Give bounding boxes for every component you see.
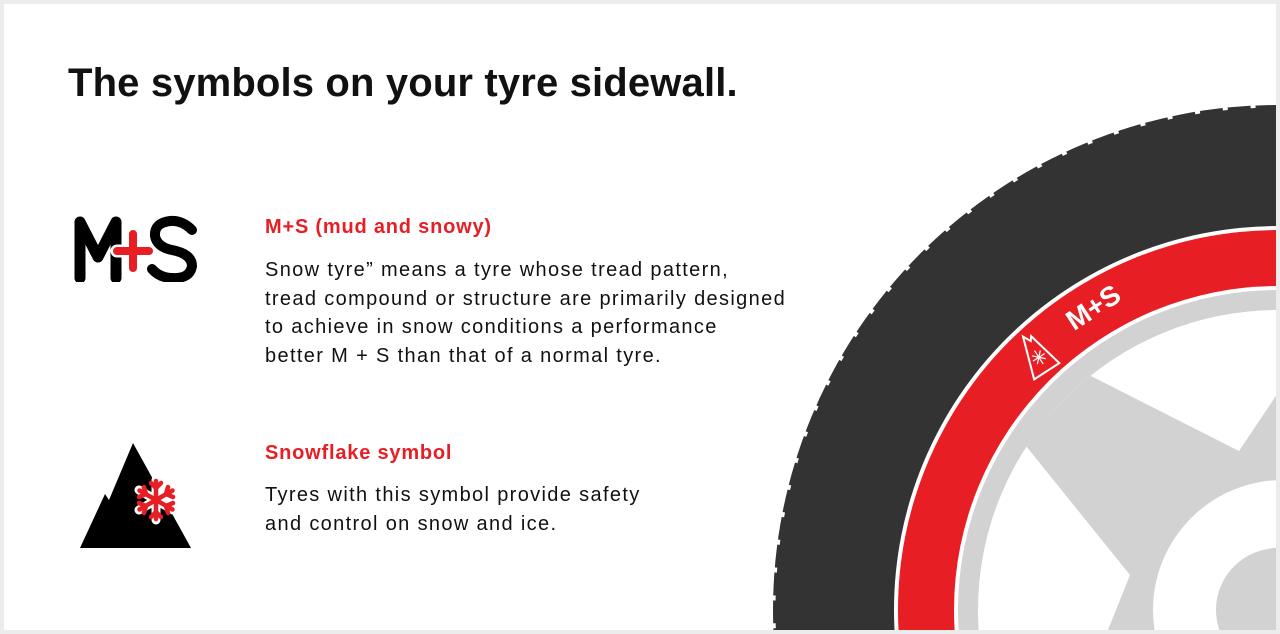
text block: M+S description: Snow tyre” means a tyre whose tread pattern, bbox=[265, 259, 729, 281]
icon: M+S logo bbox=[74, 216, 197, 282]
text block: snowflake description: Tyres with this symbol provide safety bbox=[265, 484, 641, 506]
sidewall M+S text: M+S bbox=[1060, 279, 1126, 336]
title: The symbols on your tyre sidewall. bbox=[68, 61, 738, 105]
text block: M+S description bbox=[265, 259, 786, 366]
text block: snowflake description: and control on snow and ice. bbox=[265, 512, 557, 534]
wheel rim bbox=[958, 290, 1276, 630]
heading: M+S: M+S (mud and snowy) bbox=[265, 216, 492, 238]
icon: mountain snowflake bbox=[80, 443, 191, 548]
tyre rubber bbox=[773, 105, 1280, 634]
sidewall snowflake mountain icon bbox=[1011, 328, 1059, 379]
text block: snowflake description bbox=[265, 484, 641, 534]
text block: M+S description: tread compound or structure are primarily designed bbox=[265, 288, 786, 310]
heading: snowflake symbol: Snowflake symbol bbox=[265, 442, 452, 464]
text block: M+S description: better M + S than that of a normal tyre. bbox=[265, 344, 662, 366]
text block: M+S description: to achieve in snow conditions a performance bbox=[265, 316, 718, 338]
red sidewall band bbox=[898, 230, 1280, 634]
tyre illustration bbox=[773, 105, 1276, 630]
